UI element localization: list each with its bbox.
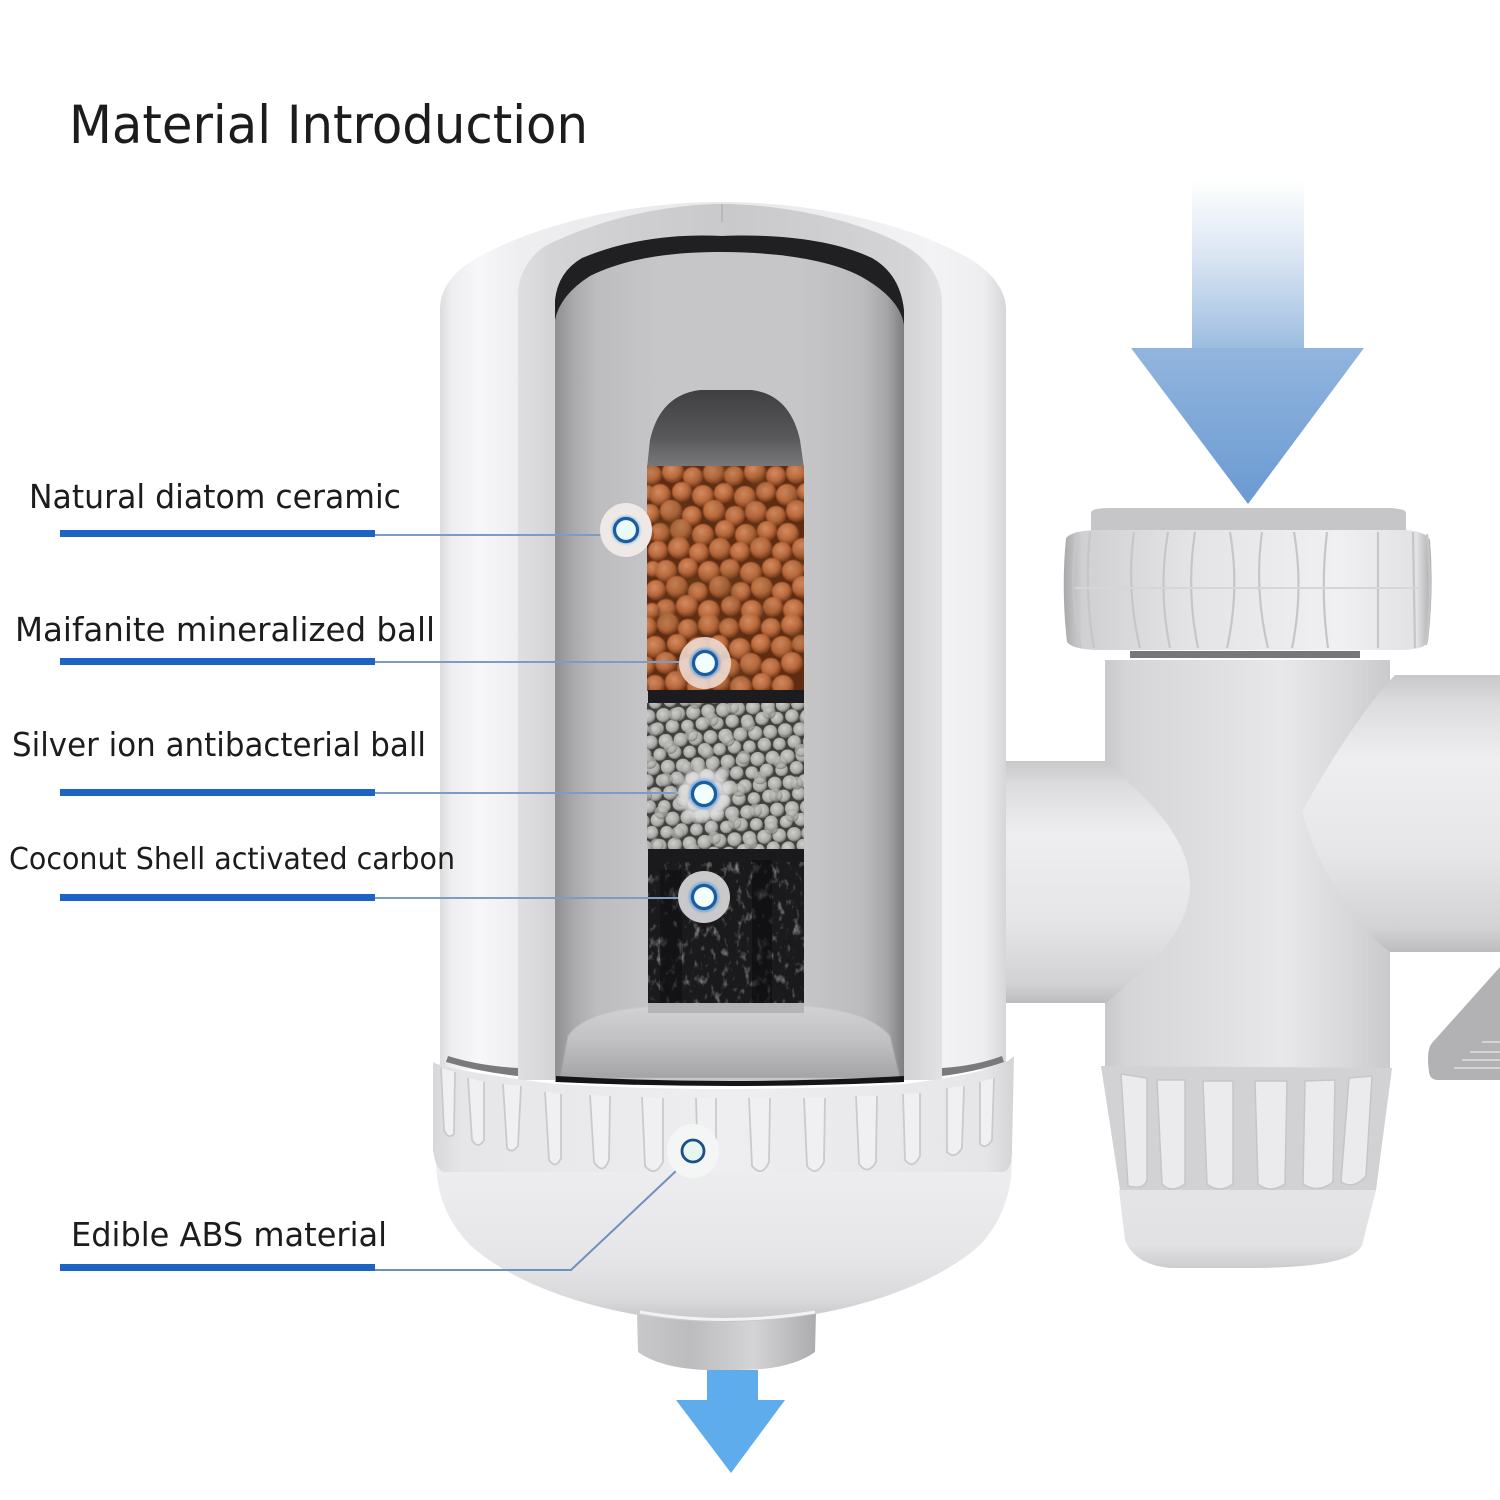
callout: edible ABS material bbox=[60, 1124, 719, 1271]
filter housing bbox=[440, 202, 1006, 1086]
outlet nozzle bbox=[637, 1312, 816, 1370]
callout: edible ABS material: Edible ABS material bbox=[71, 1215, 387, 1254]
coconut shell activated carbon layer bbox=[648, 849, 804, 1003]
callout: coconut shell activated carbon bbox=[9, 842, 730, 923]
bottom cup bbox=[1119, 1190, 1376, 1268]
lower ribbed collar bbox=[1101, 1066, 1392, 1190]
connector pipe to the right bbox=[1302, 675, 1500, 952]
dark gasket under ring bbox=[1130, 651, 1360, 658]
callout: natural diatom ceramic bbox=[29, 477, 652, 557]
lower bowl bbox=[436, 1160, 1012, 1322]
filter bottom: bowl and ribbed collar bbox=[433, 1056, 1014, 1370]
callout: maifanite mineralized ball bbox=[15, 610, 731, 689]
top threaded cap flange bbox=[1091, 508, 1406, 532]
ridged ring bbox=[1064, 530, 1432, 650]
faucet connector body bbox=[1000, 508, 1500, 1268]
connector pipe to the filter bbox=[1000, 761, 1190, 1003]
filter window arch bbox=[647, 390, 804, 468]
dark rim arc bbox=[555, 236, 904, 345]
chamber floor bbox=[560, 1006, 900, 1078]
valve lever bbox=[1428, 967, 1500, 1080]
shell foot gaps bbox=[446, 1056, 1004, 1076]
outlet water arrow bbox=[676, 1370, 785, 1473]
outer shell bbox=[440, 202, 1006, 1070]
grey cut band bbox=[518, 204, 942, 1080]
ribbed collar bbox=[433, 1056, 1014, 1172]
grip ribs bbox=[441, 1068, 994, 1171]
separator bbox=[648, 690, 804, 703]
title: Material Introduction bbox=[69, 95, 588, 156]
vertical body bbox=[1105, 660, 1390, 1082]
callout: natural diatom ceramic: Natural diatom ceramic bbox=[29, 477, 401, 516]
natural diatom ceramic layer bbox=[647, 466, 804, 691]
silver ion ball layer bbox=[647, 703, 804, 849]
inner chamber wall bbox=[555, 252, 904, 1082]
callout: silver ion antibacterial ball bbox=[12, 725, 730, 820]
callout: coconut shell activated carbon: Coconut Shell activated carbon bbox=[9, 842, 455, 877]
callout: maifanite mineralized ball: Maifanite mineralized ball bbox=[15, 610, 435, 649]
callout: silver ion antibacterial ball: Silver ion antibacterial ball bbox=[12, 725, 426, 764]
cartridge base bbox=[648, 1003, 804, 1013]
water inlet arrow bbox=[1131, 180, 1364, 504]
